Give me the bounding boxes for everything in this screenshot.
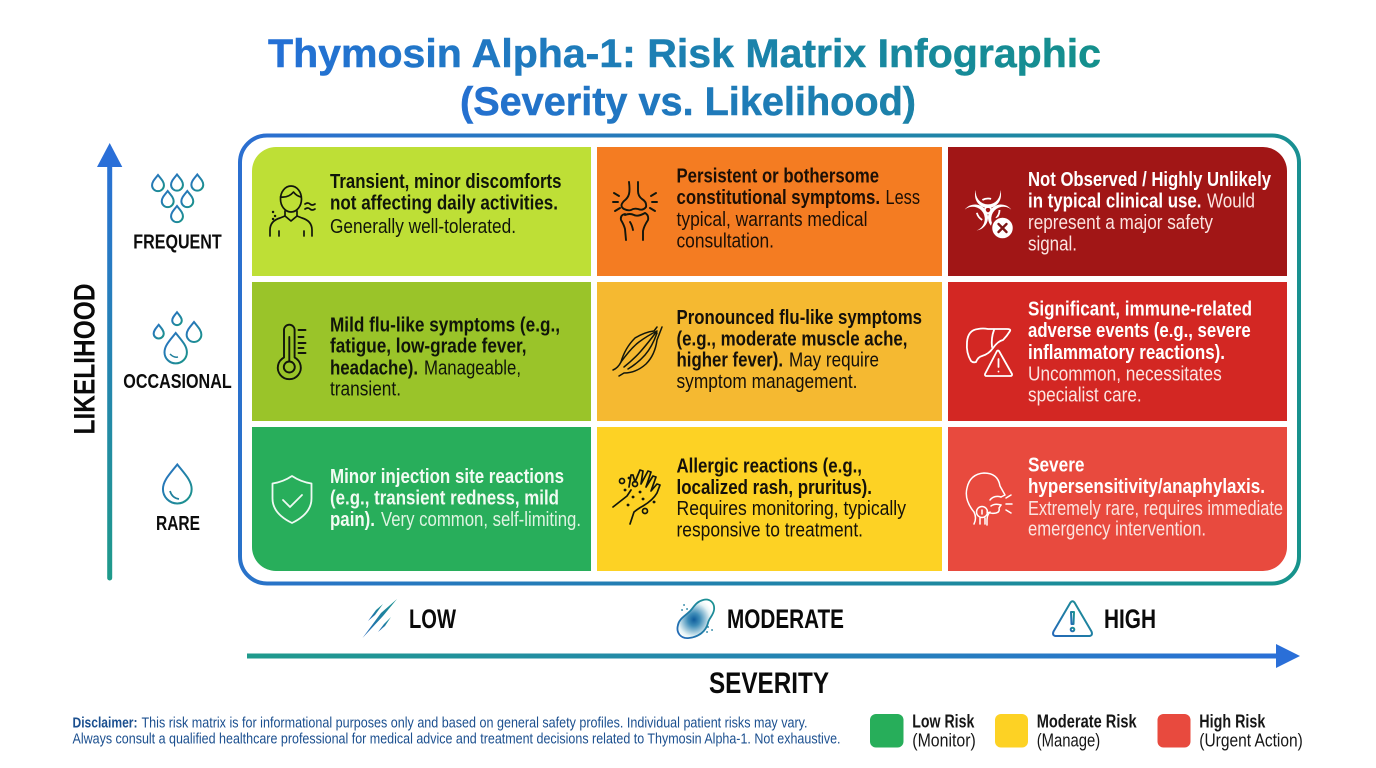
legend: moderate risk: Moderate Risk xyxy=(1037,711,1137,731)
cell text: localized rash, pruritus). xyxy=(676,477,872,499)
cell text: Would xyxy=(1207,190,1255,212)
cell text: Requires monitoring, typically xyxy=(676,498,906,520)
cell text: Allergic reactions (e.g., xyxy=(676,455,862,477)
title: (Severity vs. Likelihood) xyxy=(460,80,916,124)
cell text: signal. xyxy=(1028,234,1077,256)
icon: aching joint xyxy=(613,182,657,240)
cell text: Mild flu-like symptoms (e.g., xyxy=(330,314,560,336)
icon: hand with rash xyxy=(613,470,660,524)
cell text: Generally well-tolerated. xyxy=(330,216,516,238)
title: Thymosin Alpha-1: Risk Matrix Infographic xyxy=(268,32,1101,76)
legend: moderate risk xyxy=(995,711,1137,751)
cell text: Very common, self-limiting. xyxy=(381,509,581,531)
cell text: adverse events (e.g., severe xyxy=(1028,320,1251,342)
cell text: emergency intervention. xyxy=(1028,519,1206,541)
cell text: constitutional symptoms. xyxy=(676,187,880,209)
cell text: Not Observed / Highly Unlikely xyxy=(1028,169,1272,191)
icon: liver with warning triangle xyxy=(967,328,1012,376)
likelihood level: rare: RARE xyxy=(156,513,200,535)
likelihood level: frequent: FREQUENT xyxy=(133,231,222,253)
cell text xyxy=(676,307,922,393)
cell text xyxy=(330,171,562,238)
severity axis arrow xyxy=(247,644,1300,668)
cell text: Minor injection site reactions xyxy=(330,466,564,488)
icon: shield with check mark xyxy=(272,476,312,523)
cell text: typical, warrants medical xyxy=(676,209,868,231)
cell text: Pronounced flu-like symptoms xyxy=(676,307,922,329)
icon: single water drop xyxy=(163,464,192,503)
cell text: Manageable, xyxy=(424,357,521,379)
cell text xyxy=(1028,299,1252,407)
icon: thermometer xyxy=(278,325,306,379)
cell text: pain). xyxy=(330,509,375,531)
cell: moderate severity, occasional xyxy=(597,282,942,421)
cell text: transient. xyxy=(330,379,401,401)
likelihood level: rare xyxy=(156,464,200,535)
severity level: moderate xyxy=(677,600,844,638)
disclaimer: This risk matrix is for informational purposes only and based on general safety profiles. Individual patient risks may vary. xyxy=(142,715,808,731)
cell text xyxy=(330,466,581,531)
disclaimer: Disclaimer: xyxy=(72,715,138,731)
cell text: responsive to treatment. xyxy=(676,520,863,542)
cell: low severity, rare xyxy=(252,427,591,571)
cell text: specialist care. xyxy=(1028,385,1142,407)
disclaimer xyxy=(72,715,840,748)
likelihood level: frequent xyxy=(133,174,222,253)
severity level: low: LOW xyxy=(409,604,456,634)
cell text: Significant, immune-related xyxy=(1028,299,1252,321)
cell text: fatigue, low-grade fever, xyxy=(330,336,526,358)
icon: four water drops xyxy=(154,312,201,363)
cell: high severity, rare xyxy=(948,427,1287,571)
severity level: low xyxy=(362,599,456,638)
cell text: Extremely rare, requires immediate xyxy=(1028,498,1283,520)
icon: person with mild discomfort xyxy=(270,186,315,236)
cell text: May require xyxy=(789,350,879,372)
cell: high severity, occasional xyxy=(948,282,1287,421)
cell text: not affecting daily activities. xyxy=(330,192,558,214)
cell text: Uncommon, necessitates xyxy=(1028,364,1222,386)
cell text: headache). xyxy=(330,357,418,379)
likelihood axis title: LIKELIHOOD xyxy=(68,284,101,434)
legend: high risk: High Risk xyxy=(1199,711,1266,731)
legend: low risk xyxy=(870,711,976,751)
cell text: hypersensitivity/anaphylaxis. xyxy=(1028,476,1265,498)
cell: high severity, frequent xyxy=(948,147,1287,276)
cell text: symptom management. xyxy=(676,371,858,393)
severity level: high: HIGH xyxy=(1104,604,1156,634)
cell text: (e.g., transient redness, mild xyxy=(330,488,559,510)
cell text xyxy=(330,314,560,401)
legend: high risk xyxy=(1158,711,1303,751)
likelihood level: occasional: OCCASIONAL xyxy=(123,371,232,393)
cell text: Persistent or bothersome xyxy=(676,166,879,188)
severity level: moderate: MODERATE xyxy=(727,604,844,634)
cell text xyxy=(676,166,920,252)
legend: moderate risk: (Manage) xyxy=(1037,731,1100,751)
legend: low risk: Low Risk xyxy=(912,711,975,731)
likelihood level: occasional xyxy=(123,312,232,393)
cell text: Transient, minor discomforts xyxy=(330,171,562,193)
cell text: consultation. xyxy=(676,230,774,252)
cell text: (e.g., moderate muscle ache, xyxy=(676,328,908,350)
cell text: Less xyxy=(886,187,920,209)
legend: low risk: (Monitor) xyxy=(912,731,976,751)
cell text xyxy=(1028,169,1272,256)
icon: scratch marks xyxy=(362,599,397,638)
icon: head with swollen throat xyxy=(966,473,1012,525)
cell text xyxy=(1028,455,1283,541)
icon: warning triangle xyxy=(1053,601,1092,636)
cell: moderate severity, rare xyxy=(597,427,942,571)
severity level: high xyxy=(1053,601,1156,636)
icon: muscle fibres xyxy=(613,327,662,376)
icon: six water drops xyxy=(152,174,203,222)
matrix frame xyxy=(240,136,1299,584)
icon: biohazard with cross xyxy=(964,190,1014,239)
cell text: Severe xyxy=(1028,455,1084,477)
cell text: inflammatory reactions). xyxy=(1028,342,1225,364)
severity axis title: SEVERITY xyxy=(709,667,829,700)
cell: low severity, occasional xyxy=(252,282,591,421)
cell text: in typical clinical use. xyxy=(1028,190,1202,212)
cell: low severity, frequent xyxy=(252,147,591,276)
cell: moderate severity, frequent xyxy=(597,147,942,276)
likelihood axis arrow xyxy=(97,143,122,578)
disclaimer: Always consult a qualified healthcare professional for medical advice and treatment decisions related to Thymosin Alpha-1. Not exhaustive. xyxy=(72,732,840,748)
cell text: represent a major safety xyxy=(1028,212,1213,234)
title xyxy=(268,32,1101,124)
legend: high risk: (Urgent Action) xyxy=(1199,731,1303,751)
cell text xyxy=(676,455,906,542)
cell text: higher fever). xyxy=(676,350,783,372)
icon: bruise blob xyxy=(677,600,714,638)
